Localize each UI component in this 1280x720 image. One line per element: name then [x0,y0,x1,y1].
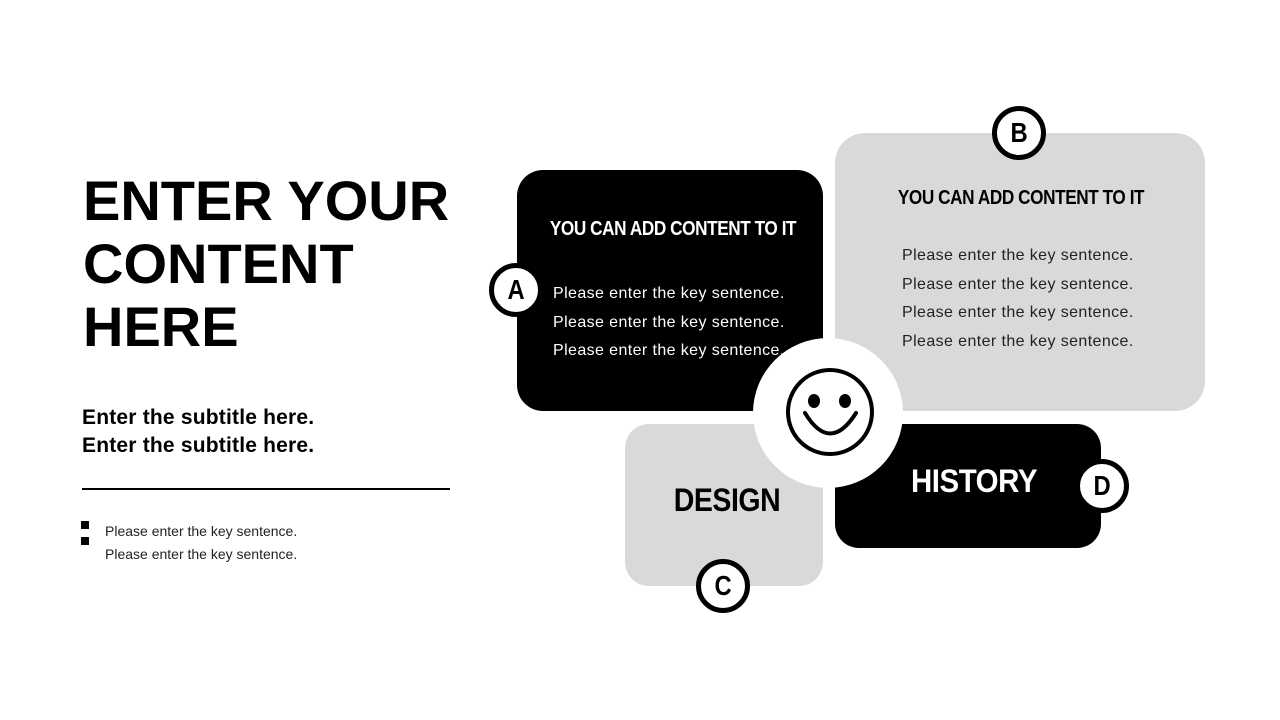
badge D: D [1093,470,1111,501]
subtitle [82,406,314,457]
title: HERE [83,295,239,358]
badge A [489,263,543,317]
panel: C design [625,424,823,586]
badge A: A [507,274,525,305]
badge D [1075,459,1129,513]
divider [82,488,450,490]
title: ENTER YOUR [83,169,449,232]
panel: B [835,133,1205,411]
text B: Please enter the key sentence. [902,304,1134,321]
text A: Please enter the key sentence. [553,314,785,330]
text A: Please enter the key sentence. [553,285,785,302]
text B: Please enter the key sentence. [902,332,1134,350]
title: CONTENT [83,232,354,295]
heading A: YOU CAN ADD CONTENT TO IT [550,218,796,240]
panel: A [517,170,823,411]
badge B [992,106,1046,160]
bullet list: Please enter the key sentence. [105,523,297,539]
panel: C design: DESIGN [674,482,780,518]
bullet list: Please enter the key sentence. [105,546,297,562]
panel: D history [835,424,1101,548]
text A [553,285,785,359]
panel: D history: HISTORY [911,463,1037,499]
badge C [696,559,750,613]
bullet list [81,521,297,562]
subtitle: Enter the subtitle here. [82,406,314,429]
text A: Please enter the key sentence. [553,342,785,359]
text B: Please enter the key sentence. [902,276,1134,292]
badge B: B [1010,117,1028,148]
heading B: YOU CAN ADD CONTENT TO IT [898,187,1144,209]
subtitle: Enter the subtitle here. [82,434,314,457]
text B: Please enter the key sentence. [902,247,1134,264]
text B [902,247,1134,350]
icon: smiley [753,338,903,488]
badge C: C [714,570,732,601]
title [83,169,449,358]
